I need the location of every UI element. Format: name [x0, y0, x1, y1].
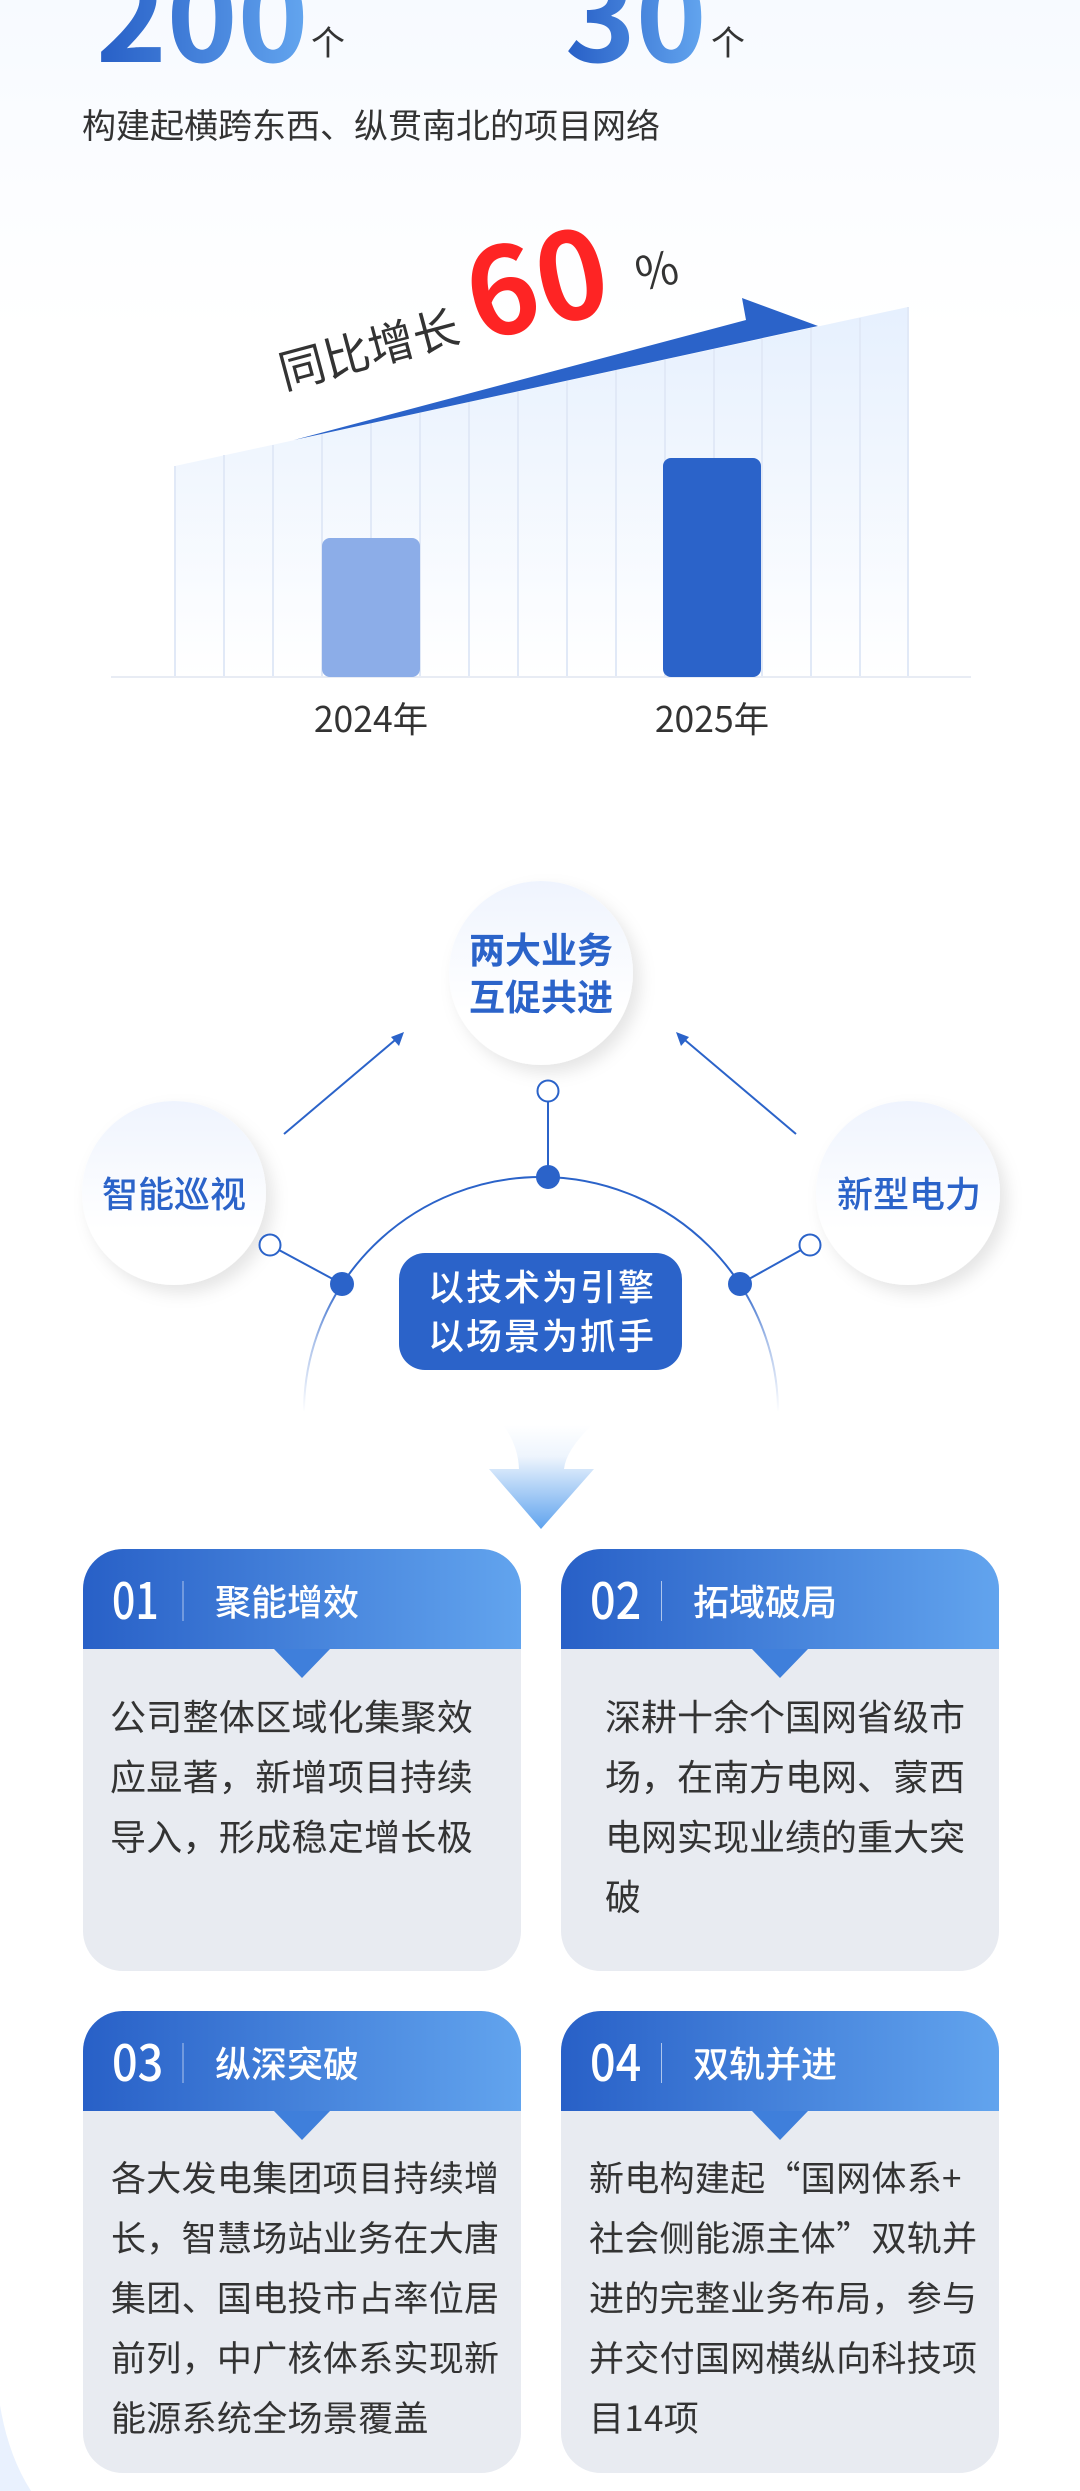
card 01: 聚能增效: 01: [112, 1562, 159, 1634]
circle: 两大业务互促共进: 两大业务: [469, 922, 613, 974]
card 03: 纵深突破: 集团、国电投市占率位居: [111, 2271, 499, 2322]
card 04: 双轨并进: 并交付国网横纵向科技项: [589, 2331, 977, 2382]
bar chart: year-on-year growth: [111, 307, 971, 743]
card 01: 聚能增效: 导入，形成稳定增长极: [110, 1809, 473, 1861]
card 04: 双轨并进: 04: [590, 2023, 641, 2096]
circle: 智能巡视: 智能巡视: [102, 1166, 246, 1218]
center box: 以技术为引擎 以场景为抓手: [399, 1253, 682, 1370]
bar: 2025: [663, 458, 761, 677]
circle: 两大业务互促共进: [449, 881, 633, 1065]
label: 2024: 2024年: [314, 692, 428, 743]
number: 60: 60: [448, 175, 622, 375]
center box: 以技术为引擎 以场景为抓手: 以场景为抓手: [428, 1308, 656, 1360]
arrow: growth trend: [294, 298, 818, 440]
card 02: 拓域破局: [561, 1549, 999, 1971]
node: top: [536, 1080, 560, 1189]
center box: 以技术为引擎 以场景为抓手: 以技术为引擎: [428, 1259, 656, 1311]
card 01: 聚能增效: 聚能增效: [215, 1574, 359, 1626]
card 02: 拓域破局: 场，在南方电网、蒙西: [605, 1749, 965, 1801]
card 04: 双轨并进: 进的完整业务布局，参与: [589, 2271, 977, 2322]
node: left: [260, 1234, 354, 1296]
arrow: right to top: [676, 1032, 796, 1134]
arrow: left to top: [284, 1032, 404, 1134]
card 04: 双轨并进: 双轨并进: [693, 2036, 837, 2088]
arrow: down: [489, 1425, 594, 1529]
card 03: 纵深突破: 03: [112, 2023, 163, 2096]
card 01: 聚能增效: 公司整体区域化集聚效: [110, 1689, 473, 1741]
label: 2025: 2025年: [655, 692, 769, 743]
card 03: 纵深突破: 纵深突破: [215, 2036, 359, 2088]
card 02: 拓域破局: 拓域破局: [693, 1574, 837, 1626]
chart area background: [175, 307, 908, 677]
circle: 新型电力: [816, 1101, 1000, 1285]
circle: 新型电力: 新型电力: [837, 1166, 981, 1218]
card 02: 拓域破局: 破: [605, 1869, 641, 1921]
card 04: 双轨并进: [561, 2011, 999, 2473]
circle: 智能巡视: [82, 1101, 266, 1285]
card 02: 拓域破局: 电网实现业绩的重大突: [605, 1809, 965, 1861]
stat: 30 projects: 个: [711, 16, 745, 65]
card 03: 纵深突破: [83, 2011, 521, 2473]
unit: percent: %: [629, 231, 684, 305]
stat: 200 projects: 个: [311, 16, 345, 65]
card 03: 纵深突破: 各大发电集团项目持续增: [111, 2151, 499, 2202]
card 01: 聚能增效: 应显著，新增项目持续: [110, 1749, 473, 1801]
bar: 2024: [322, 538, 420, 677]
arc connector with nodes: [260, 1080, 820, 1412]
card 03: 纵深突破: 能源系统全场景覆盖: [111, 2391, 429, 2442]
card 03: 纵深突破: 长，智慧场站业务在大唐: [111, 2211, 499, 2262]
node: right: [728, 1234, 820, 1296]
card 04: 双轨并进: 新电构建起“国网体系+: [589, 2151, 962, 2202]
card 01: 聚能增效: [83, 1549, 521, 1971]
card 04: 双轨并进: 社会侧能源主体”双轨并: [589, 2211, 977, 2262]
card 03: 纵深突破: 前列，中广核体系实现新: [111, 2331, 499, 2382]
card 04: 双轨并进: 目14项: [589, 2391, 699, 2442]
card 02: 拓域破局: 02: [590, 1561, 641, 1634]
label: 同比增长: 同比增长: [271, 291, 466, 403]
circle: 两大业务互促共进: 互促共进: [469, 969, 613, 1021]
card 02: 拓域破局: 深耕十余个国网省级市: [605, 1689, 965, 1741]
text: network description: 构建起横跨东西、纵贯南北的项目网络: [82, 99, 660, 148]
